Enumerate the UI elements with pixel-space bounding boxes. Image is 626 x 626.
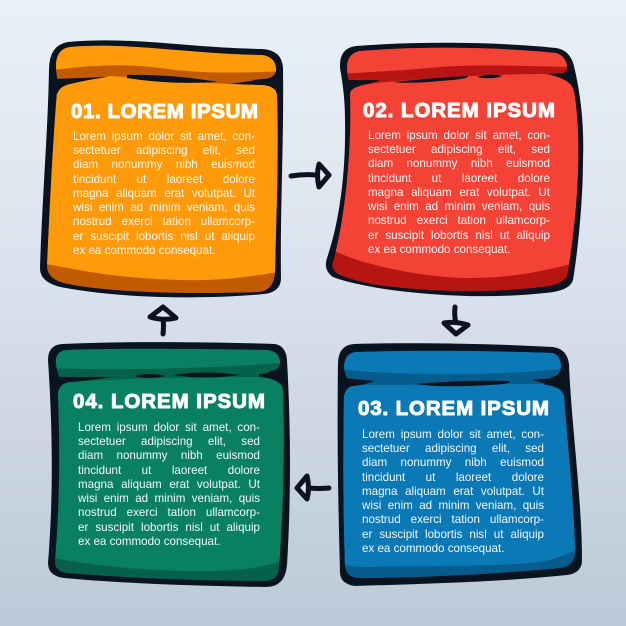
text block: wisi enim ad minim veniam, quis (78, 492, 260, 505)
text block: wisi enim ad minim veniam, quis (368, 200, 550, 213)
heading: 04. LOREM IPSUM (73, 390, 265, 413)
text block: Lorem ipsum dolor sit amet, con- (362, 428, 544, 441)
text block: diam nonummy nibh euismod (368, 157, 550, 170)
scroll top (344, 350, 561, 374)
text block: diam nonummy nibh euismod (73, 158, 255, 171)
scroll shade (344, 351, 561, 388)
text block: Lorem ipsum dolor sit amet, con- (368, 129, 550, 142)
text block: wisi enim ad minim veniam, quis (73, 201, 255, 214)
text block: sectetuer adipiscing elit, sed (368, 143, 550, 156)
scroll top (347, 48, 567, 74)
card body (47, 76, 278, 280)
text block: sectetuer adipiscing elit, sed (73, 144, 255, 157)
heading: 01. LOREM IPSUM (71, 100, 258, 123)
text block: Lorem ipsum dolor sit amet, con- (73, 130, 255, 143)
text block: diam nonummy nibh euismod (362, 456, 544, 469)
panel outline (326, 43, 583, 296)
crease marks (345, 73, 578, 94)
text block: sectetuer adipiscing elit, sed (362, 442, 544, 455)
card body shade (332, 74, 578, 291)
text block (362, 428, 544, 555)
text block: magna aliquam erat volutpat. Ut (78, 478, 260, 491)
card body shade (343, 384, 575, 578)
panel: step 01 orange (40, 40, 284, 298)
panel: step 04 green (48, 342, 290, 587)
text block (368, 129, 550, 256)
text block: tincidunt ut laoreet dolore (362, 471, 544, 484)
text block: nostrud exerci tation ullamcorp- (368, 214, 550, 227)
panel outline (338, 343, 582, 586)
heading: 03. LOREM IPSUM (358, 397, 549, 420)
panel outline (48, 342, 290, 587)
scroll shade (56, 349, 280, 382)
text block: er suscipit lobortis nisl ut aliquip (362, 528, 544, 541)
crease marks (54, 75, 282, 94)
text block: magna aliquam erat volutpat. Ut (368, 186, 550, 199)
heading: 02. LOREM IPSUM (363, 99, 555, 122)
text block: wisi enim ad minim veniam, quis (362, 499, 544, 512)
text block: Lorem ipsum dolor sit amet, con- (78, 421, 260, 434)
text block: tincidunt ut laoreet dolore (73, 173, 255, 186)
text block: er suscipit lobortis nisl ut aliquip (368, 229, 550, 242)
panel: step 02 red (326, 42, 584, 296)
text block: er suscipit lobortis nisl ut aliquip (78, 521, 260, 534)
text block: tincidunt ut laoreet dolore (368, 172, 550, 185)
scroll top (56, 348, 280, 369)
text block: ex ea commodo consequat. (78, 535, 220, 548)
scroll shade (56, 46, 276, 86)
text block: sectetuer adipiscing elit, sed (78, 435, 260, 448)
text block: tincidunt ut laoreet dolore (78, 464, 260, 477)
scroll shade (347, 48, 567, 86)
text block (78, 421, 260, 548)
panel: step 03 blue (338, 343, 582, 586)
text block: nostrud exerci tation ullamcorp- (78, 506, 260, 519)
text block: ex ea commodo consequat. (362, 542, 504, 555)
card body shade (47, 76, 278, 293)
scroll top (56, 46, 276, 72)
text block (73, 130, 255, 257)
card body (343, 384, 575, 568)
crease marks (55, 372, 284, 392)
text block: magna aliquam erat volutpat. Ut (362, 485, 544, 498)
text block: nostrud exerci tation ullamcorp- (73, 215, 255, 228)
text block: magna aliquam erat volutpat. Ut (73, 187, 255, 200)
text block: er suscipit lobortis nisl ut aliquip (73, 230, 255, 243)
card body (336, 74, 578, 278)
panel outline (40, 40, 283, 297)
card body shade (55, 377, 284, 581)
card body (55, 377, 284, 571)
text block: nostrud exerci tation ullamcorp- (362, 513, 544, 526)
crease marks (344, 378, 566, 394)
text block: ex ea commodo consequat. (368, 243, 510, 256)
text block: ex ea commodo consequat. (73, 244, 215, 257)
text block: diam nonummy nibh euismod (78, 449, 260, 462)
